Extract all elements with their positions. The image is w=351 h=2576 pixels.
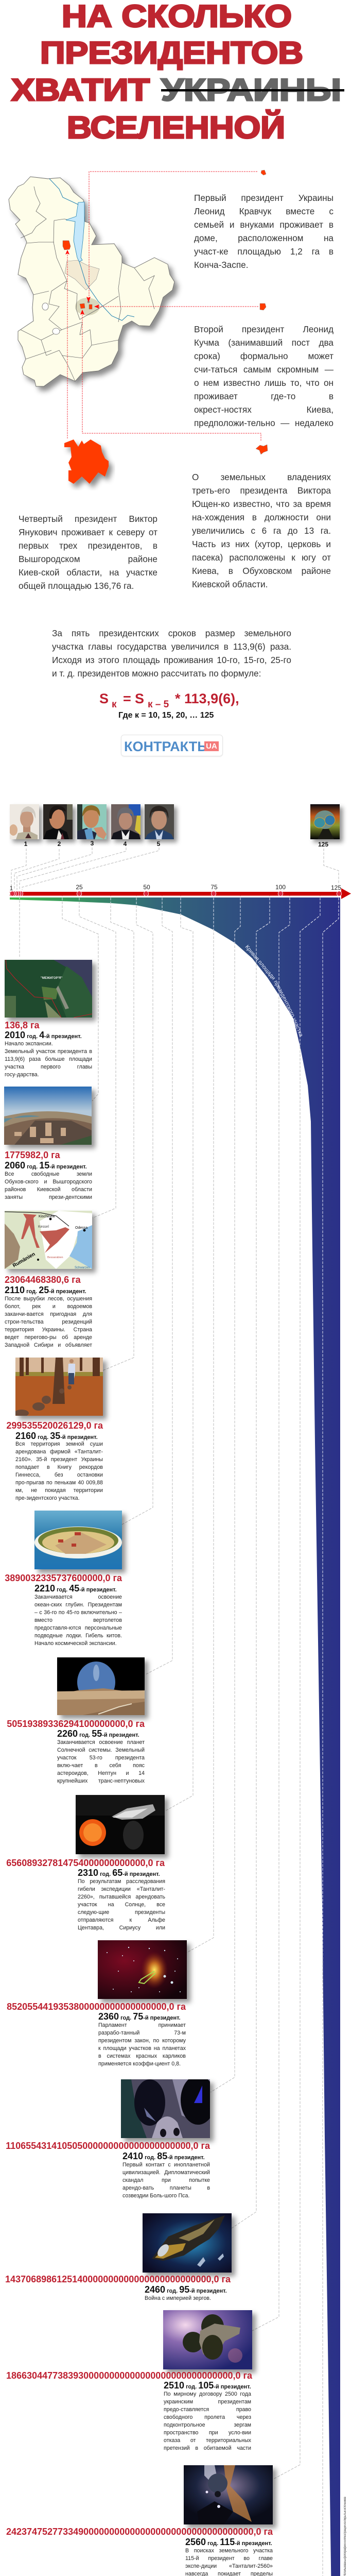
text: second president: проживает где-то в: [194, 391, 334, 401]
land area: 3890032335737600000,0 га: [5, 1573, 122, 1583]
text: third president: О земельных владениях: [192, 472, 331, 482]
timeline entry: 75th president: к площади участков на планетах: [98, 2045, 186, 2052]
text: third president: Киева, в Обуховском районе: [192, 566, 331, 576]
residence markers and dashed arrows: [63, 170, 268, 484]
timeline entry: 65th president: участок на Солнце, все: [78, 1902, 165, 1908]
timeline entry: 35th president: 2160 год. 35-й президент.: [15, 1431, 98, 1441]
title: ВСЕЛЕННОЙ: [67, 110, 285, 145]
portrait 125: [310, 804, 340, 839]
text: formula intro: и т. д. президентов можно рассчитать по формуле:: [52, 668, 261, 679]
timeline entry: 75th president: президентом закон, по которому: [98, 2038, 186, 2044]
timeline entry: 35th president: про-прыгав по пенькам 40 009,88: [15, 1480, 103, 1486]
timeline entry: 95th president: [5, 2213, 239, 2301]
portrait numbers: 3: [91, 840, 94, 847]
photo: Mezhyhirya satellite: "МЕЖИГОР'Я": [41, 977, 62, 980]
title: ПРЕЗИДЕНТОВ: [40, 36, 303, 70]
timeline entry: 4th president: [5, 960, 99, 1078]
timeline entry: 45th president: Начало космической экспансии.: [34, 1640, 117, 1647]
photo: map of Bessarabia: Rumänien: [12, 1251, 36, 1269]
text: second president: [194, 324, 334, 428]
photo: deep space nebula: [184, 2465, 273, 2524]
text: second president: срока) формально может: [194, 351, 334, 361]
text: second president: счи-таться самым скромным —: [194, 364, 334, 375]
timeline entry: 105th president: предо-ставляется право: [164, 2406, 251, 2413]
land area: 299535520026129,0 га: [6, 1420, 103, 1431]
timeline entry: 85th president: скандал при попытке: [122, 2177, 210, 2183]
timeline entry: 15th president: Обухов-ского и Вышгородского: [5, 1179, 92, 1185]
timeline entry: 65th president: 2260», пытавшейся арендовать: [78, 1894, 165, 1900]
text: third president: [192, 472, 331, 589]
portrait numbers: 5: [157, 840, 161, 848]
timeline entry: 35th president: 2160». 35-й президент Украины: [15, 1456, 103, 1463]
timeline tick labels: 1: [10, 885, 13, 892]
portrait 2: [43, 804, 73, 839]
timeline entry: 75th president: разрабо-танный 73-м: [98, 2030, 186, 2036]
photo: alien face: [121, 2079, 210, 2138]
text: first president: участ-ке площадью 1,2 га в: [194, 246, 334, 257]
photo: map of Bessarabia: [5, 1211, 92, 1269]
land area: 23064468380,6 га: [5, 1275, 81, 1285]
photo: ring island: [34, 1511, 122, 1569]
timeline entry: 75th president: в системах красных карликов: [98, 2053, 186, 2059]
timeline entry: 65th president: гибели экспедиции «Танталит-: [78, 1886, 165, 1892]
text: second president: Кучма (занимавший пост два: [194, 337, 334, 348]
text: first president: доме, расположенном на: [194, 233, 334, 243]
timeline entry: 45th president: подводные лодки. Гибель китов.: [34, 1633, 122, 1639]
timeline entry: 85th president: 2410 год. 85-й президент.: [122, 2151, 205, 2161]
timeline entry: 45th president: [5, 1511, 129, 1647]
formula: Где к = 10, 15, 20, … 125: [118, 711, 214, 720]
timeline tick labels: 50: [143, 884, 150, 891]
timeline entry: 45th president: – с 36-го по 45-го включительно –: [34, 1609, 122, 1616]
timeline entry: 75th president: 2360 год. 75-й президент.: [98, 2011, 181, 2022]
timeline entry: 4th president: 113,9(6) раза больше площади: [5, 1056, 92, 1062]
text: third president: на-хождения в должности они: [192, 512, 331, 522]
timeline entry: 35th president: [6, 1358, 110, 1501]
text: first president: семьей и внуками проживает в: [194, 219, 334, 230]
timeline entry: 35th president: км, не покидая территории: [15, 1487, 103, 1494]
timeline entry: 55th president: Солнечной системы. Земельный: [57, 1747, 145, 1753]
text: fourth president: первых трех президентов, в: [19, 540, 157, 551]
text: second president: о нем известно лишь то, что он: [194, 378, 334, 388]
portrait 5: [145, 804, 174, 839]
text: fourth president: Четвертый президент Виктор: [19, 514, 157, 524]
text: second president: окрест-ностях Киева,: [194, 404, 334, 415]
text: third president: пасека) расположены к югу от: [192, 552, 331, 563]
photo: city panorama: [4, 1087, 92, 1145]
land area: 8520554419353800000000000000000,0 га: [7, 2002, 186, 2012]
timeline entry: 65th president: Центавра, Сириусу или: [78, 1925, 165, 1931]
land area: 110655431410505000000000000000000000,0 га: [6, 2141, 210, 2151]
timeline entry: 4th president: госу-дарства.: [5, 1072, 39, 1078]
timeline entry: 45th president: вместо вертолетов: [34, 1617, 122, 1623]
timeline entry: 115th president: 115-й президент во главе: [185, 2555, 273, 2562]
timeline tick labels: 75: [210, 884, 218, 891]
timeline entry: 15th president: 2060 год. 15-й президент.: [5, 1160, 87, 1171]
title: УКРАИНЫ: [161, 73, 341, 107]
title: НА СКОЛЬКО: [62, 0, 292, 33]
timeline entry: 85th president: [6, 2079, 217, 2199]
timeline entry: 25th president: заканчи-вается пригодная для: [5, 1311, 92, 1317]
title: ХВАТИТ: [11, 73, 150, 107]
timeline entry: 35th president: попадает в Книгу рекордов: [15, 1464, 103, 1470]
timeline entry: 25th president: 2110 год. 25-й президент.: [5, 1285, 86, 1295]
portrait numbers: 4: [124, 840, 127, 848]
portrait numbers: 125: [318, 841, 328, 848]
timeline entry: 15th president: заняты прези-дентскими: [5, 1194, 92, 1200]
photo: alien spaceship: [143, 2213, 232, 2273]
land area: 242374752773349000000000000000000000000000000000,0 га: [6, 2527, 273, 2537]
timeline entry: 115th president: 2560 год. 115-й президент.: [185, 2537, 272, 2547]
logo: Контракты.ua: [121, 735, 223, 756]
text: formula intro: [52, 628, 291, 679]
photo: Neptune from a rocky world: [57, 1657, 145, 1715]
timeline entry: 85th president: созвездии Боль-шого Пса.: [122, 2193, 189, 2199]
timeline entry: 15th president: районов Киевской области: [5, 1187, 92, 1193]
timeline entry: 95th president: 2460 год. 95-й президент.: [145, 2284, 227, 2295]
timeline entry: 45th president: океан-ских глубин. Президентам: [34, 1602, 122, 1608]
timeline entry: 105th president: пространство при усло-вии: [164, 2430, 251, 2436]
timeline entry: 75th president: Парламент принимает: [98, 2022, 186, 2028]
text: formula intro: участка главы государства увеличился в 113,9(6) раза.: [52, 641, 291, 652]
timeline tick labels: 125: [331, 884, 341, 891]
timeline entry: 4th president: Земельный участок президента в: [5, 1048, 92, 1055]
timeline entry: 105th president: [6, 2310, 259, 2451]
land area: 50519389336294100000000,0 га: [7, 1719, 145, 1729]
timeline entry: 95th president: Война с империей зергов.: [145, 2295, 211, 2301]
land area: 18663044773839300000000000000000000000000000,0 га: [6, 2370, 252, 2381]
land area: 136,8 га: [5, 1020, 40, 1030]
timeline entry: 4th president: Начало экспансии.: [5, 1041, 53, 1047]
map of Kyiv region: [9, 177, 174, 386]
timeline entry: 55th president: участок 53-го президента: [57, 1755, 145, 1761]
portrait 3: [77, 804, 107, 839]
timeline entry: 4th president: 2010 год. 4-й президент.: [5, 1030, 82, 1040]
logo: Контракты.ua: КОНТРАКТЫ: [124, 739, 211, 754]
timeline tick labels: 100: [275, 884, 286, 891]
photo: map of Bessarabia: Kischinew: [39, 1215, 55, 1218]
text: formula intro: За пять президентских сроков размер земельного: [52, 628, 291, 638]
timeline entry: 55th president: [7, 1657, 151, 1784]
timeline tick labels: 25: [76, 884, 83, 891]
photo: felled forest: [15, 1358, 103, 1416]
timeline entry: 105th president: претензий в обитаемой части: [164, 2445, 251, 2451]
text: first president: Леонид Кравчук вместе с: [194, 206, 334, 216]
land area: 656089327814754000000000000,0 га: [6, 1858, 165, 1868]
timeline entry: 65th president: По результатам расследования: [78, 1878, 165, 1885]
timeline entry: 105th president: подконтрольное зергам: [164, 2422, 251, 2428]
formula: * 113,9(6),: [175, 691, 239, 706]
text: fourth president: Киев-ской области, на участке: [19, 567, 157, 578]
text: fourth president: общей площадью 136,76 га.: [19, 581, 134, 591]
land area curve: [10, 897, 340, 2576]
timeline entry: 45th president: предоставля-ются персональные: [34, 1625, 122, 1631]
text: third president: треть-его президента Виктора: [192, 485, 331, 496]
land area: 1437068986125140000000000000000000000000,0 га: [5, 2274, 231, 2284]
text: first president: Конча-Заспе.: [194, 260, 248, 270]
timeline entry: 25th president: После вырубки лесов, осушения: [5, 1296, 92, 1302]
formula: S: [135, 691, 144, 706]
text: fourth president: Вышгородском районе: [19, 554, 157, 564]
photo: map of Bessarabia: Odessa: [75, 1226, 87, 1230]
timeline entry: 85th president: цивилизацией. Дипломатический: [122, 2170, 210, 2176]
timeline entry: 55th president: вклю-чает в себя пояс: [57, 1762, 145, 1769]
timeline entry: 105th president: отказа от территориальных: [164, 2437, 251, 2444]
text: second president: Второй президент Леонид: [194, 324, 334, 334]
land area: 1775982,0 га: [5, 1150, 60, 1160]
timeline entry: 85th president: арендо-вать планеты в: [122, 2185, 210, 2191]
timeline entry: 115th president: [6, 2465, 280, 2576]
timeline entry: 25th president: Западной Сибири и объявляет: [5, 1342, 92, 1348]
timeline entry: 105th president: По мирному договору 2500 года: [164, 2391, 251, 2397]
timeline entry: 75th president: применяется коэффи-циент 0,8.: [98, 2061, 181, 2067]
timeline entry: 45th president: Заканчивается освоение: [34, 1594, 122, 1600]
timeline entry: 25th president: [5, 1211, 99, 1348]
text: third president: Киевской области.: [192, 579, 268, 589]
timeline entry: 65th president: 2310 год. 65-й президент.: [78, 1868, 160, 1878]
photo: inhabited asteroid: [163, 2310, 252, 2369]
timeline entry: 85th president: Первый контакт с инопланетной: [122, 2162, 210, 2168]
formula: =: [123, 691, 131, 706]
timeline entry: 4th president: участка первого главы: [5, 1064, 92, 1070]
portrait numbers: 2: [58, 840, 61, 848]
timeline entry: 25th president: строи-тельства резиденций: [5, 1319, 92, 1325]
timeline entry: 115th president: экспе-диции «Танталит-2560»: [185, 2563, 273, 2569]
photo: map of Bessarabia: Kessel: [38, 1225, 49, 1229]
title: [11, 0, 344, 145]
portrait 4: [111, 804, 141, 839]
logo: Контракты.ua: UA: [206, 742, 217, 751]
photo: ship near the Sun: [76, 1795, 165, 1854]
formula: к: [112, 699, 117, 710]
photo: red nebula: [98, 1940, 187, 1999]
timeline entry: 15th president: Все свободные земли: [5, 1171, 92, 1177]
timeline tick labels: [10, 884, 341, 892]
timeline entry: 35th president: Гиннесса, без остановки: [15, 1472, 103, 1478]
text: fourth president: Янукович проживает к северу от: [19, 527, 157, 537]
curve label: Кривая площади президентского участка: [245, 945, 303, 1037]
portrait 1: [10, 804, 39, 839]
timeline entry: 115th president: В поисках земельного участка: [185, 2548, 273, 2554]
text: third president: увеличились с 6 га до 13 га.: [192, 526, 331, 536]
portrait numbers: 1: [24, 840, 28, 848]
formula: к – 5: [148, 699, 169, 710]
timeline entry: 35th president: арендована фирмой «Танталит-: [15, 1449, 103, 1455]
timeline entry: 105th president: 2510 год. 105-й президент.: [164, 2380, 251, 2391]
timeline entry: 25th president: болот, рек и водоемов: [5, 1303, 92, 1310]
timeline entry: 55th president: крупнейших транс-нептуновых: [57, 1778, 145, 1784]
formula: S: [99, 691, 109, 706]
timeline entry: 25th president: территория Украины. Страна: [5, 1327, 92, 1333]
connector lines: [11, 848, 339, 2576]
text: third president: Ющен-ко известно, что за время: [192, 499, 331, 509]
photo: map of Bessarabia: Bessarabien: [47, 1256, 63, 1259]
timeline entry: 65th president: следую-щие президенты: [78, 1909, 165, 1916]
text: first president: [194, 193, 334, 270]
timeline entry: 45th president: 2210 год. 45-й президент.: [34, 1583, 117, 1594]
timeline entry: 105th president: свободного пролета через: [164, 2414, 251, 2420]
timeline entry: 55th president: 2260 год. 55-й президент.: [57, 1728, 139, 1739]
timeline entry: 55th president: астероидов, Нептун и 14: [57, 1770, 145, 1776]
formula: [99, 691, 239, 720]
text: third president: Часть из них (хутор, церковь и: [192, 539, 331, 549]
timeline entry: 25th president: ведет перегово-ры об аренде: [5, 1334, 92, 1341]
text: second president: предположи-тельно — недалеко: [194, 418, 334, 428]
timeline entry: 105th president: украинским президентам: [164, 2399, 251, 2405]
timeline entry: 15th president: [4, 1087, 99, 1200]
timeline entry: 35th president: Вся территория земной суши: [15, 1441, 103, 1447]
timeline bar with arrow: [10, 888, 351, 899]
timeline entry: 65th president: [6, 1795, 172, 1931]
portrait numbers: [24, 840, 328, 848]
timeline entry: 35th president: пре-зидентского участка.: [15, 1495, 80, 1501]
timeline entry: 75th president: [7, 1940, 194, 2067]
text: fourth president: [19, 514, 157, 591]
timeline entry: 65th president: отправляются к Альфе: [78, 1917, 165, 1923]
photo: Mezhyhirya satellite: [5, 960, 92, 1018]
text: formula intro: Исходя из этого площадь проживания 10-го, 15-го, 25-го: [52, 655, 291, 665]
text: first president: Первый президент Украины: [194, 193, 334, 203]
timeline entry: 55th president: Заканчивается освоение планет: [57, 1739, 145, 1745]
